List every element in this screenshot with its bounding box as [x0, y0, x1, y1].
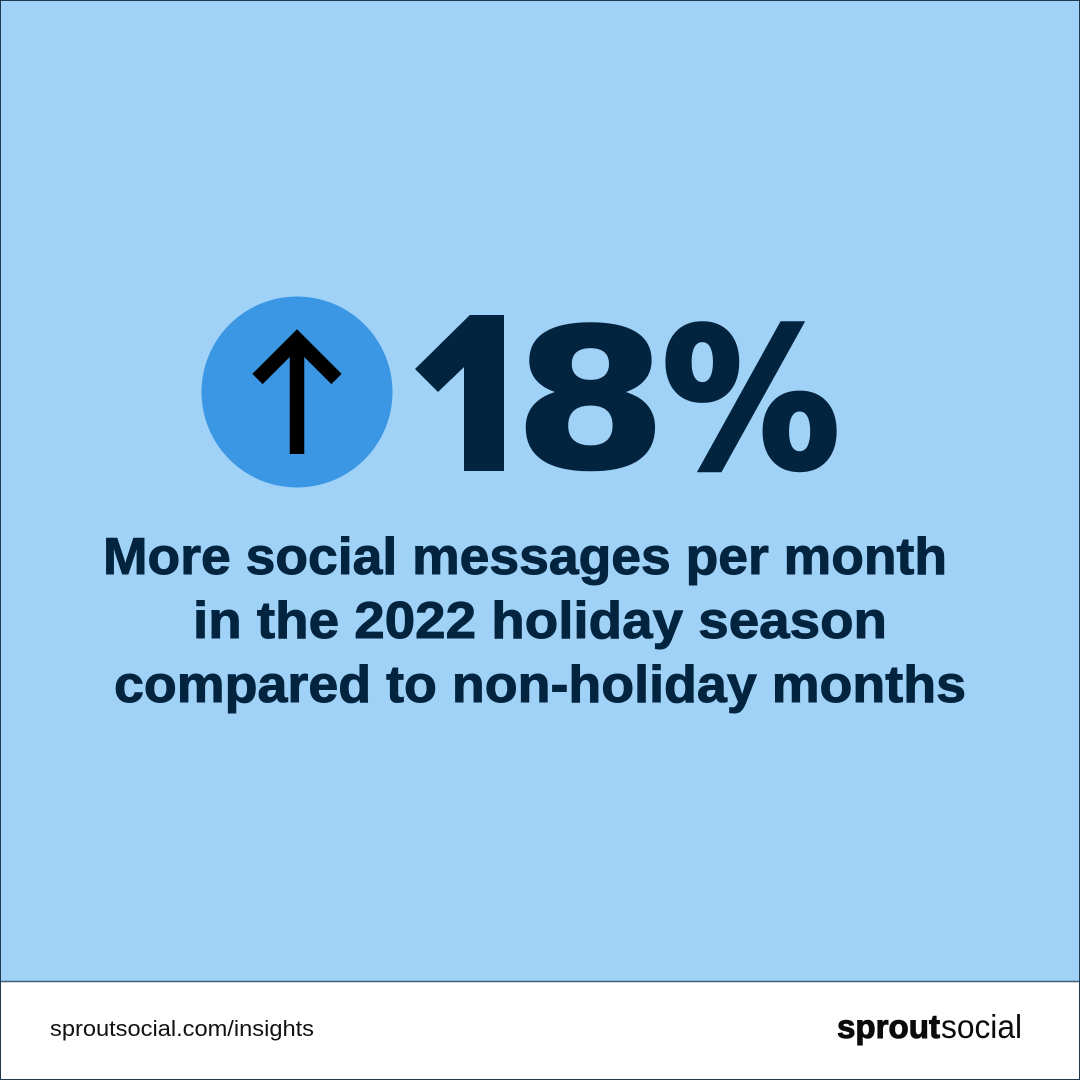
text block: description: More social messages per month: [103, 528, 947, 586]
text block: description: [103, 528, 966, 714]
logo: sproutsocial: sprout: [837, 1008, 940, 1045]
big number: 18%: 1: [401, 271, 526, 522]
logo: sproutsocial: social: [941, 1008, 1022, 1045]
big number: 18%: %: [662, 288, 840, 513]
text block: description: compared to non-holiday months: [114, 656, 966, 714]
logo: sproutsocial: [837, 1008, 1022, 1045]
icon: up arrow in circle: [202, 296, 392, 488]
footer url: sproutsocial.com/insights: [50, 1016, 314, 1041]
big number: 18%: 8: [514, 288, 667, 513]
big number: 18%: [415, 315, 837, 472]
text block: description: in the 2022 holiday season: [193, 592, 887, 650]
